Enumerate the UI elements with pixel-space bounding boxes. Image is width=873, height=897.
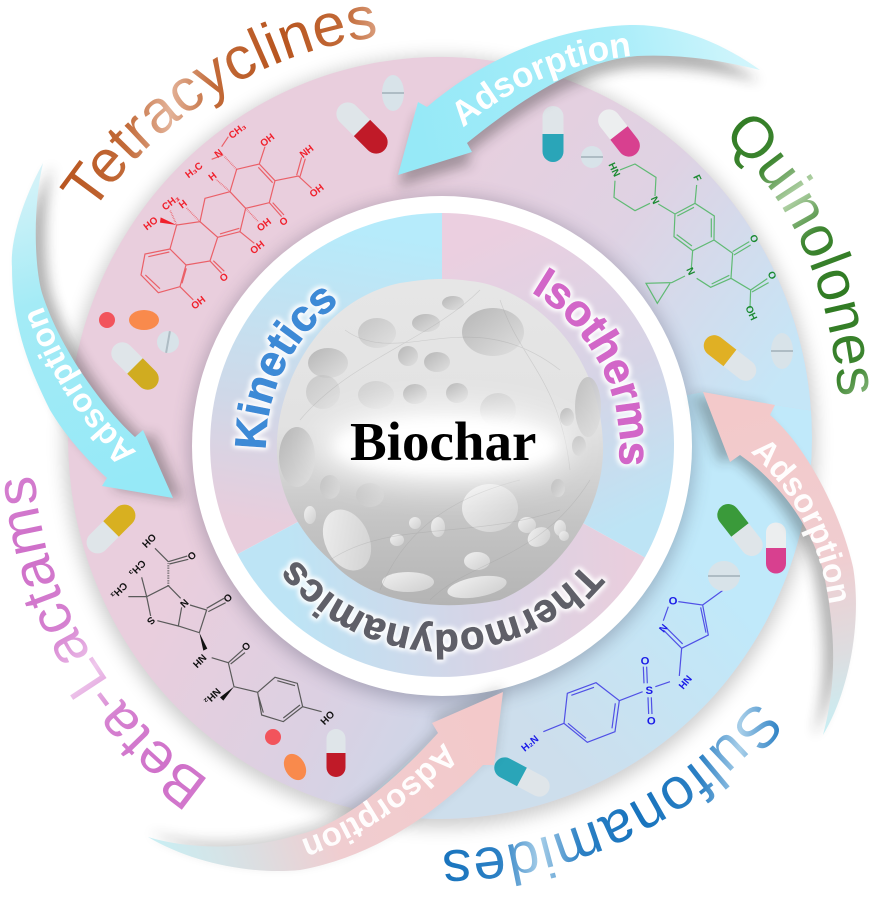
pill: pink capsule top [594, 105, 644, 161]
sector: kinetics [210, 213, 442, 554]
white glow [321, 410, 571, 482]
atom labels [520, 596, 693, 754]
atom labels: O [278, 215, 291, 229]
atom labels: CH₃ [160, 193, 182, 213]
atom labels: O [647, 715, 656, 727]
title: Biochar: Biochar [350, 411, 536, 472]
atom labels: CH₃ [108, 579, 129, 601]
atom labels: NH [298, 143, 316, 161]
pill: orange oval lower [279, 750, 311, 784]
disc shadow [64, 57, 816, 827]
pill: teal capsule lower [491, 754, 553, 800]
pill: yellow capsule right [700, 331, 760, 385]
atom labels: H₂N [520, 734, 541, 754]
atom labels: O [184, 548, 198, 562]
atom labels: OH [255, 216, 274, 234]
outer ring: drug panels [68, 57, 812, 819]
atom labels: O [218, 271, 231, 285]
atom labels: NH₂ [201, 685, 222, 706]
atom labels: OH [258, 132, 277, 150]
pill: teal capsule [542, 106, 564, 162]
pill: yellow capsule left [107, 338, 163, 394]
atom labels: OH [139, 531, 158, 549]
atom labels: HO [142, 215, 161, 233]
sector: thermodynamics [237, 445, 645, 677]
sector: isotherms [442, 213, 674, 558]
tablet: round lower right [708, 561, 740, 591]
atom labels: H [177, 198, 190, 211]
arrow text: Adsorption [751, 442, 846, 603]
pills and tablets [82, 75, 793, 800]
pill: green capsule [713, 500, 767, 560]
tablet: oval top [382, 75, 404, 111]
pores: upper, shaded [279, 296, 601, 507]
pill: red capsule lower [326, 729, 346, 777]
atom labels: S [646, 685, 654, 697]
tablet: small round [581, 146, 603, 168]
arrow text: Adsorption [28, 308, 136, 462]
label: Isotherms: Isotherms [530, 264, 648, 469]
atom labels: NH [676, 673, 693, 691]
pill: red capsule top [332, 98, 392, 158]
atom labels: N [213, 147, 225, 161]
label: Kinetics: Kinetics [231, 284, 340, 452]
atom labels: O [641, 656, 650, 668]
molecule: tetracycline [141, 121, 326, 312]
heading: Sulfonamides: Sulfonamides [444, 706, 779, 886]
arrow text: Adsorption [456, 38, 630, 128]
atom labels: F [690, 173, 703, 183]
atom labels: O [669, 596, 678, 608]
central ring shadow [189, 196, 695, 702]
atom labels: CH₃ [227, 121, 249, 142]
atom labels: OH [189, 294, 208, 312]
pill: orange oval upper [129, 310, 159, 330]
pill: red ball upper [99, 312, 115, 328]
atom labels [606, 161, 778, 322]
atom labels: HN [606, 161, 622, 179]
atom labels: O [220, 591, 234, 604]
arrow: bottom adsorption [148, 685, 506, 871]
atom labels [108, 531, 336, 726]
atom labels: OH [742, 304, 759, 322]
pill: pink capsule lower [766, 522, 786, 574]
atom labels: OH [248, 239, 267, 257]
white ring [192, 196, 692, 696]
atom labels: N [648, 195, 661, 206]
panel: tetracyclines background [68, 58, 424, 796]
atom labels: H₃C [184, 160, 205, 181]
arrow: right adsorption [690, 389, 856, 735]
atom labels: N [177, 596, 190, 609]
atom labels: NH [190, 651, 208, 669]
panel: sulfonamides background [372, 392, 812, 819]
atom labels: S [144, 614, 157, 627]
pores: lower, bright [304, 484, 569, 602]
atom labels: O [765, 270, 778, 282]
atom labels: N [656, 621, 669, 634]
arrow: top adsorption [394, 25, 760, 191]
atom labels: CH₃ [126, 557, 147, 579]
tablet: round left [155, 329, 181, 355]
atom labels: H [207, 170, 219, 184]
fibres [300, 290, 590, 600]
atom labels: OH [308, 182, 326, 200]
pill: red ball lower [265, 729, 281, 745]
molecule: amoxicillin [108, 531, 336, 726]
panel: beta-lactams background [219, 643, 503, 808]
atom labels [142, 121, 326, 312]
atom labels: O [747, 233, 760, 245]
arrow: left adsorption [12, 164, 186, 506]
inner sectors [210, 213, 674, 677]
sphere body [277, 279, 603, 605]
atom labels: OH [318, 708, 336, 726]
biochar sphere [277, 279, 603, 605]
arrow text: Adsorption [302, 743, 454, 855]
atom labels: O [239, 639, 252, 653]
tablet: oval right [771, 333, 793, 369]
label: Thermodynamics: Thermodynamics [279, 558, 609, 664]
atom labels: N [683, 266, 696, 277]
panel: quinolones background [570, 122, 811, 410]
molecule: sulfamethoxazole [520, 590, 723, 754]
pill: yellow capsule beta-lactams [82, 500, 140, 558]
molecule: ciprofloxacin [606, 161, 778, 322]
